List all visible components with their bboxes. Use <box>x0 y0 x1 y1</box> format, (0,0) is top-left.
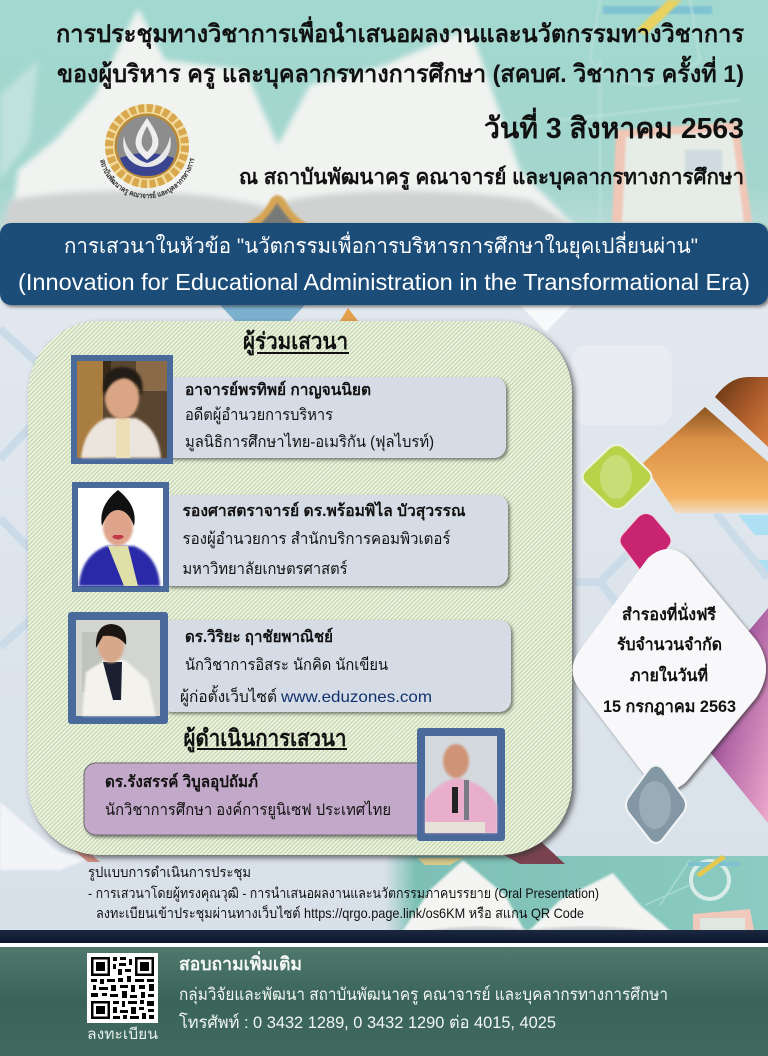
panel: registration diamond: ภายในวันที่ <box>630 663 708 685</box>
text block: conference format <box>88 864 599 922</box>
card: speaker 1: อาจารย์พรทิพย์ กาญจนนิยต <box>185 380 371 400</box>
card: speaker 3: www.eduzones.com <box>280 689 432 706</box>
photo: speaker 1 <box>71 355 173 464</box>
background: right side orange shape <box>643 377 768 572</box>
card: speaker 3 <box>160 620 511 712</box>
heading: moderator: ผู้ดำเนินการเสวนา <box>184 725 346 753</box>
background: bottom chalkboard with book <box>385 855 768 932</box>
card: speaker 3: นักวิชาการอิสระ นักคิด นักเขียน <box>185 656 388 674</box>
panel: registration diamond: รับจำนวนจำกัด <box>617 636 722 654</box>
panel: speakers <box>28 321 572 855</box>
card: moderator: ดร.รังสรรค์ วิบูลอุปถัมภ์ <box>105 772 258 793</box>
icon: QR code <box>87 953 158 1023</box>
heading: date: วันที่ 3 สิงหาคม 2563 <box>484 107 744 145</box>
panel: registration diamond: 15 กรกฎาคม 2563 <box>603 698 736 716</box>
card: speaker 1: อดีตผู้อำนวยการบริหาร <box>185 406 333 425</box>
footer: contact strip <box>0 943 768 1056</box>
icon: green diamond <box>582 445 652 509</box>
icon: grey diamond <box>626 766 686 843</box>
icon: magenta diamond <box>620 514 671 577</box>
background: shapes below panel <box>55 835 565 864</box>
photo: moderator <box>417 728 505 841</box>
panel: registration diamond: สำรองที่นั่งฟรี <box>622 602 716 624</box>
card: speaker 1: มูลนิธิการศึกษาไทย-อเมริกัน (ฟุลไบรท์) <box>185 432 434 452</box>
text block: contact details <box>179 951 668 1032</box>
title: conference name: การประชุมทางวิชาการเพื่อนำเสนอผลงานและนวัตกรรมทางวิชาการ <box>56 16 745 50</box>
text block: conference format: - การเสวนาโดยผู้ทรงคุณวุฒิ - การนำเสนอผลงานและนวัตกรรมภาคบรรยาย (Oral Presentation) <box>88 885 599 902</box>
card: speaker 2: มหาวิทยาลัยเกษตรศาสตร์ <box>182 559 348 578</box>
banner: panel discussion topic <box>0 223 768 305</box>
heading: venue: ณ สถาบันพัฒนาครู คณาจารย์ และบุคลากรทางการศึกษา <box>239 165 744 191</box>
card: moderator <box>84 763 429 835</box>
card: speaker 2: รองศาสตราจารย์ ดร.พร้อมพิไล บัวสุวรรณ <box>182 501 466 521</box>
title: conference name <box>56 16 745 90</box>
card: speaker 2: รองผู้อำนวยการ สำนักบริการคอมพิวเตอร์ <box>182 529 451 549</box>
card: speaker 3: ผู้ก่อตั้งเว็บไซต์ <box>180 685 277 707</box>
photo: speaker 2 <box>72 482 169 592</box>
icon: institute seal logo <box>100 104 194 198</box>
banner: panel discussion topic: (Innovation for Educational Administration in the Transformational Era) <box>18 269 750 295</box>
label: register under QR: ลงทะเบียน <box>87 1026 158 1043</box>
heading: panelists: ผู้ร่วมเสวนา <box>243 328 348 356</box>
text block: conference format: ลงทะเบียนเข้าประชุมผ่านทางเว็บไซต์ https://qrgo.page.link/os6KM หรือ สแกน QR Code <box>96 904 584 922</box>
text block: contact details: สอบถามเพิ่มเติม <box>179 951 302 974</box>
photo: speaker 3 <box>68 612 168 724</box>
card: speaker 3: ดร.วิริยะ ฤาชัยพาณิชย์ <box>185 627 333 646</box>
text block: contact details: กลุ่มวิจัยและพัฒนา สถาบันพัฒนาครู คณาจารย์ และบุคลากรทางการศึกษา <box>179 985 668 1005</box>
text block: conference format: รูปแบบการดำเนินการประชุม <box>88 864 251 881</box>
background: right side purple shape <box>710 608 768 823</box>
background: top chalkboard with open book <box>0 0 768 232</box>
panel: registration diamond <box>572 549 766 790</box>
divider: dark band <box>0 930 768 943</box>
title: conference name: ของผู้บริหาร ครู และบุคลากรทางการศึกษา (สคบศ. วิชาการ ครั้งที่ 1) <box>57 55 744 90</box>
card: speaker 2 <box>160 495 508 586</box>
text block: contact details: โทรศัพท์ : 0 3432 1289, 0 3432 1290 ต่อ 4015, 4025 <box>179 1012 556 1032</box>
banner: panel discussion topic: การเสวนาในหัวข้อ "นวัตกรรมเพื่อการบริหารการศึกษาในยุคเปลี่ยนผ่าน" <box>64 231 698 259</box>
card: speaker 1 <box>160 377 506 458</box>
card: moderator: นักวิชาการศึกษา องค์การยูนิเซฟ ประเทศไทย <box>105 800 391 820</box>
